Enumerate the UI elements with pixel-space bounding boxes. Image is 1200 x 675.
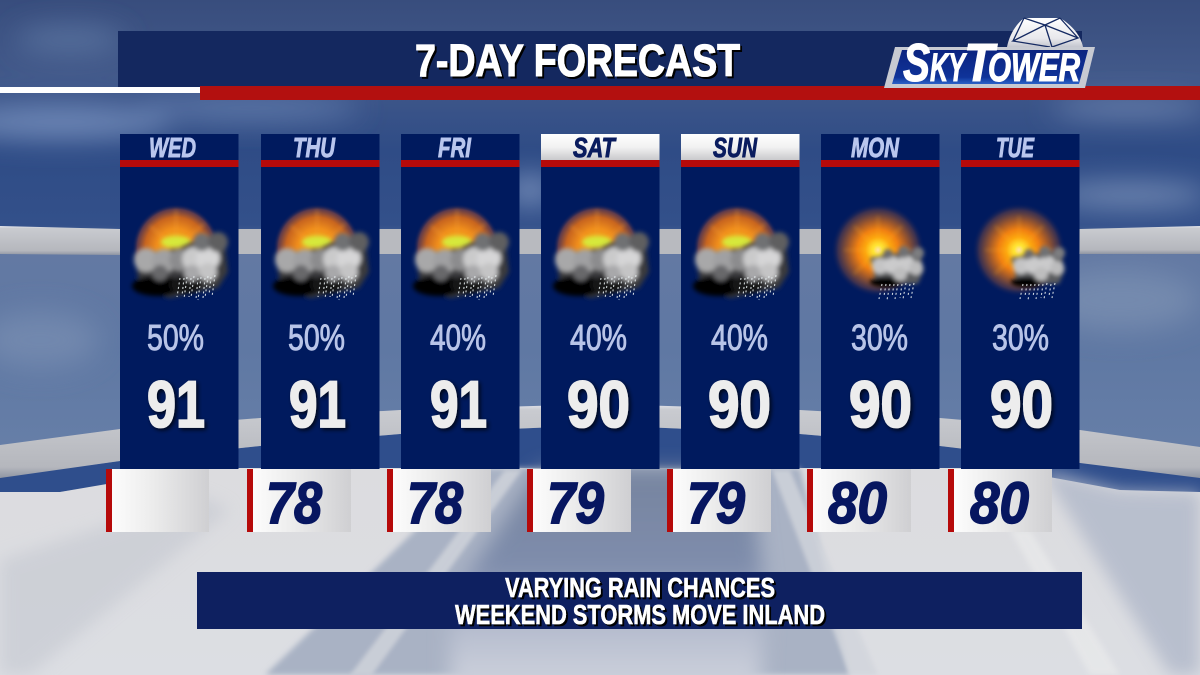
low temperature: 80 [970, 471, 1029, 536]
low box: Saturday [527, 469, 631, 536]
logo: SkyTower [884, 18, 1095, 93]
low temperature: 79 [687, 471, 745, 536]
high temperature: 90 [708, 367, 771, 441]
day label: THU [293, 132, 336, 163]
rain chance: 50% [147, 317, 204, 358]
title: 7-DAY FORECAST [415, 35, 740, 86]
panel: Sunday [681, 132, 800, 469]
icon: sun behind rain cloud [553, 204, 649, 300]
day label: TUE [996, 132, 1035, 163]
footer line 2: WEEKEND STORMS MOVE INLAND [455, 599, 825, 630]
rain chance: 30% [851, 317, 908, 358]
day label: WED [149, 132, 196, 163]
panel: Saturday [541, 132, 660, 469]
low box: Wednesday [106, 469, 209, 532]
rain chance: 40% [711, 317, 768, 358]
panel: Thursday [261, 132, 380, 469]
day label: FRI [438, 132, 472, 163]
logo: SkyTower: S [903, 33, 930, 93]
logo: SkyTower: KY [930, 46, 967, 90]
footer line 1: VARYING RAIN CHANCES [505, 572, 775, 603]
floor [0, 468, 1200, 675]
icon: sun with small rain cloud [831, 203, 925, 300]
low box: Monday [807, 469, 911, 536]
rain chance: 30% [992, 317, 1049, 358]
icon: sun behind rain cloud [693, 204, 789, 300]
low box: Friday [387, 469, 491, 536]
rain chance: 50% [288, 317, 345, 358]
low temperature: 80 [828, 471, 887, 536]
lower railing left [0, 404, 600, 478]
upper railing left [0, 226, 120, 255]
footer banner [197, 572, 1082, 630]
icon: sun with small rain cloud [972, 203, 1066, 300]
white accent line [0, 87, 200, 93]
rain chance: 40% [570, 317, 627, 358]
low temperature: 78 [266, 471, 323, 536]
title band [118, 31, 1082, 87]
high temperature: 90 [567, 367, 630, 441]
icon: sun behind rain cloud [413, 204, 509, 300]
high temperature: 90 [990, 367, 1053, 441]
red accent line [200, 86, 1200, 100]
day label: MON [851, 132, 900, 163]
high temperature: 91 [147, 367, 205, 441]
low temperature: 79 [547, 471, 604, 536]
low box: Thursday [247, 469, 351, 536]
icon: dome [1007, 18, 1083, 47]
icon: sun behind rain cloud [132, 204, 228, 300]
logo: SkyTower: T [964, 33, 998, 93]
icon: sun behind rain cloud [273, 204, 369, 300]
distant blue deck band [0, 425, 1200, 492]
day label: SUN [713, 132, 758, 163]
upper railing middle [120, 229, 1080, 254]
day label: SAT [573, 132, 617, 163]
panel: Wednesday [120, 132, 238, 469]
low box: Tuesday [948, 469, 1052, 536]
panel: Monday [821, 132, 940, 469]
logo: SkyTower: OWER [988, 46, 1080, 90]
low temperature: 78 [407, 471, 464, 536]
rain chance: 40% [430, 317, 486, 358]
high temperature: 91 [430, 367, 487, 441]
high temperature: 90 [849, 367, 912, 441]
upper railing right [1080, 226, 1200, 254]
sky background [0, 0, 1200, 500]
high temperature: 91 [289, 367, 346, 441]
panel: Friday [401, 132, 520, 469]
panel: Tuesday [961, 132, 1080, 469]
low box: Sunday [667, 469, 771, 536]
lower railing right [600, 404, 1200, 478]
